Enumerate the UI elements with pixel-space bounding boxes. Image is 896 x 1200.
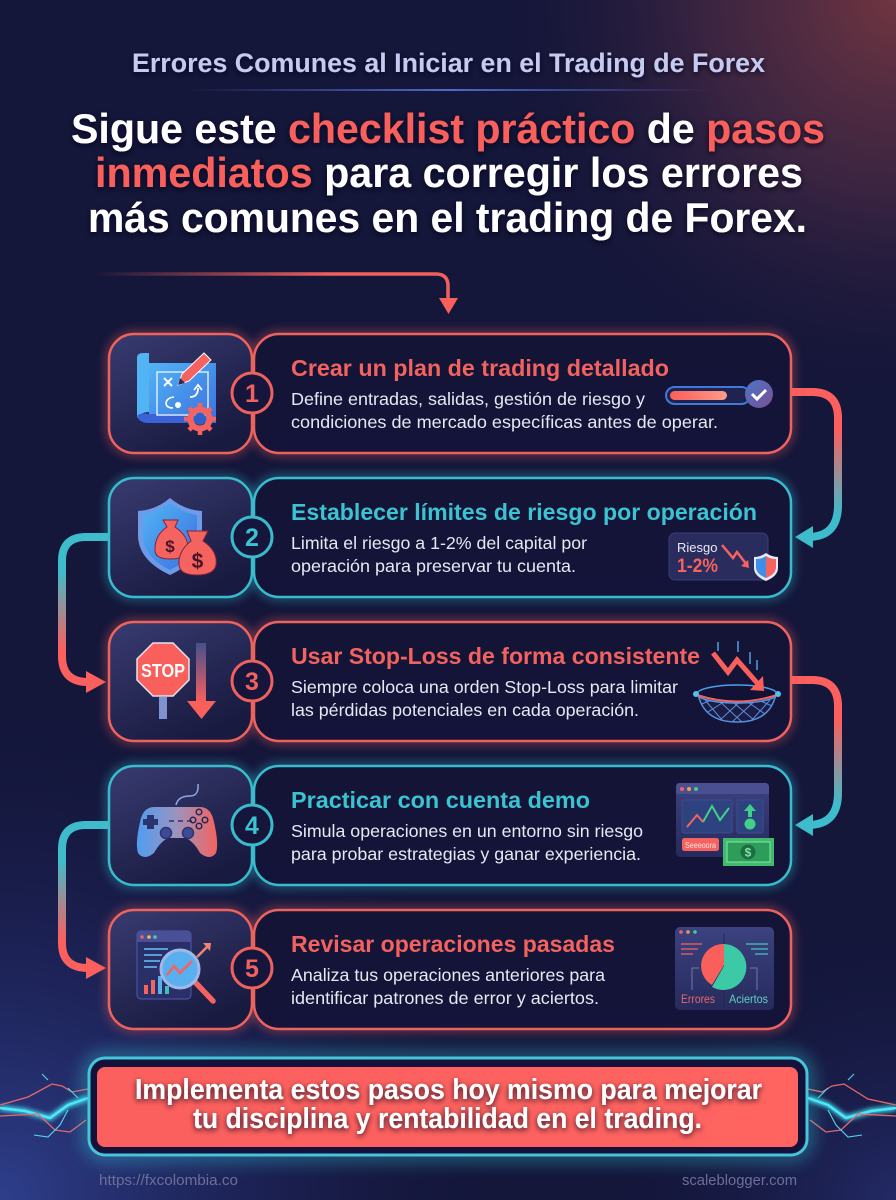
footer left url: https://fxcolombia.co xyxy=(99,1173,238,1189)
text block step 5 xyxy=(291,965,605,1008)
heading step 3: Usar Stop-Loss de forma consistente xyxy=(291,643,700,669)
text block step 5: identificar patrones de error y aciertos. xyxy=(291,988,599,1008)
number badge 2 xyxy=(232,517,272,557)
callout text xyxy=(135,1074,762,1135)
icon: stop sign with down arrow: STOP xyxy=(141,661,185,681)
headline: inmediatos para corregir los errores xyxy=(95,149,803,196)
panel: step 3 xyxy=(109,622,791,741)
text block step 3: Siempre coloca una orden Stop-Loss para limitar xyxy=(291,677,678,697)
icon: risk card 1-2% with shield: Riesgo xyxy=(677,540,717,555)
panel: step 5 xyxy=(109,910,791,1029)
panel: step 4 xyxy=(109,766,791,885)
icon: stop sign with down arrow xyxy=(137,643,216,719)
callout text: Implementa estos pasos hoy mismo para mejorar xyxy=(135,1074,762,1106)
callout: call to action xyxy=(89,1058,807,1155)
text block step 2: Limita el riesgo a 1-2% del capital por xyxy=(291,533,587,553)
connector arrow: step 3 to step 4 xyxy=(791,680,838,836)
heading step 4: Practicar con cuenta demo xyxy=(291,787,590,813)
icon: risk card 1-2% with shield xyxy=(669,533,778,581)
connector arrow: step 2 to step 3 xyxy=(62,537,109,693)
text block step 4 xyxy=(291,821,643,864)
icon: blueprint map with pencil and gear xyxy=(137,353,216,435)
text block step 3: las pérdidas potenciales en cada operación. xyxy=(291,700,639,720)
number badge 1: 1 xyxy=(245,380,259,408)
lightning right xyxy=(808,1074,896,1137)
text block step 4: Simula operaciones en un entorno sin riesgo xyxy=(291,821,643,841)
icon: falling arrow into safety net xyxy=(693,641,781,722)
arrow: top intro arrow xyxy=(92,274,458,314)
footer right url: scaleblogger.com xyxy=(682,1173,797,1189)
icon detail: gear xyxy=(184,403,216,435)
number badge 1 xyxy=(232,373,272,413)
number badge 3 xyxy=(232,661,272,701)
number badge 5: 5 xyxy=(245,955,259,983)
icon: demo trading window with cash: $ xyxy=(745,846,752,860)
divider xyxy=(187,89,713,91)
icon: shield with money bags xyxy=(138,498,216,575)
text block step 4: para probar estrategias y ganar experiencia. xyxy=(291,844,641,864)
icon: game controller xyxy=(137,784,217,857)
text block step 1: condiciones de mercado específicas antes de operar. xyxy=(291,412,718,432)
number badge 3: 3 xyxy=(245,668,259,696)
text block step 5: Analiza tus operaciones anteriores para xyxy=(291,965,605,985)
headline xyxy=(71,105,825,241)
number badge 4 xyxy=(232,805,272,845)
icon: errors vs wins pie chart card: Errores xyxy=(681,992,715,1006)
headline: más comunes en el trading de Forex. xyxy=(88,194,807,241)
icon: shield with money bags: $ xyxy=(192,550,204,573)
number badge 4: 4 xyxy=(245,812,259,840)
connector arrow: step 4 to step 5 xyxy=(62,825,109,979)
icon: report window with magnifier xyxy=(137,931,213,1001)
icon: risk card 1-2% with shield: 1-2% xyxy=(677,556,718,577)
subtitle: Errores Comunes al Iniciar en el Trading de Forex xyxy=(132,48,765,78)
icon: demo trading window with cash xyxy=(676,783,774,866)
icon: demo trading window with cash: Seeeoora xyxy=(685,840,716,850)
text block step 1: Define entradas, salidas, gestión de riesgo y xyxy=(291,389,645,409)
text block step 2 xyxy=(291,533,587,576)
icon: progress slider with check xyxy=(666,380,773,408)
text block step 1 xyxy=(291,389,718,432)
number badge 2: 2 xyxy=(245,524,259,552)
panel: step 2 xyxy=(109,478,791,597)
lightning left xyxy=(0,1074,88,1137)
number badge 5 xyxy=(232,948,272,988)
icon: shield with money bags: $ xyxy=(165,537,175,556)
heading step 1: Crear un plan de trading detallado xyxy=(291,355,669,381)
icon: errors vs wins pie chart card xyxy=(675,927,774,1010)
callout text: tu disciplina y rentabilidad en el trading. xyxy=(193,1103,702,1135)
connector arrow: step 1 to step 2 xyxy=(791,392,838,548)
panel: step 1 xyxy=(109,334,791,453)
text block step 2: operación para preservar tu cuenta. xyxy=(291,556,576,576)
text block step 3 xyxy=(291,677,678,720)
icon: errors vs wins pie chart card: Aciertos xyxy=(729,992,768,1006)
heading step 2: Establecer límites de riesgo por operación xyxy=(291,499,757,525)
headline: Sigue este checklist práctico de pasos xyxy=(71,105,825,152)
heading step 5: Revisar operaciones pasadas xyxy=(291,931,615,957)
